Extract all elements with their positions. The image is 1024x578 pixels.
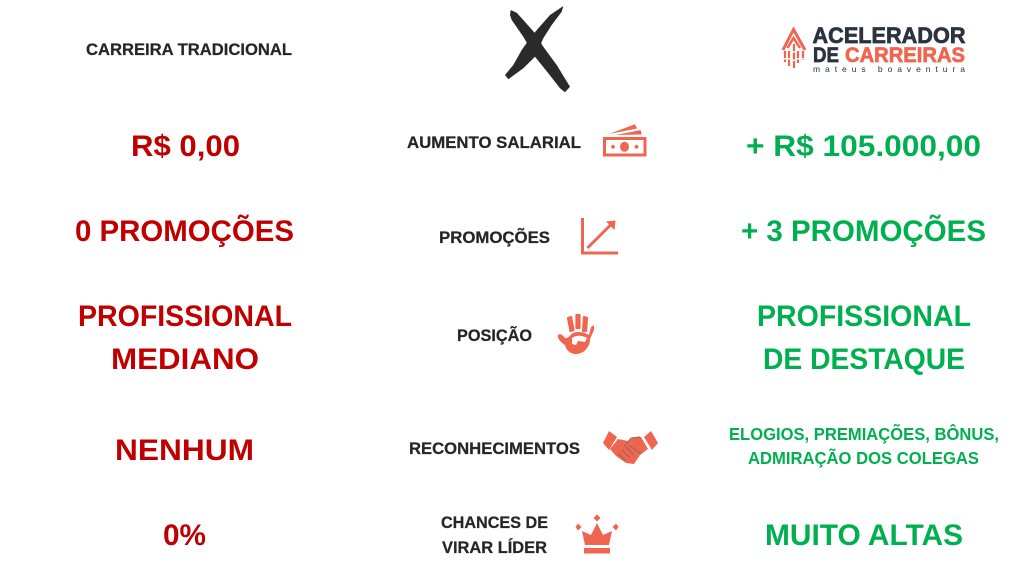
icon: crown: [576, 514, 618, 554]
logo text: ACELERADOR: [812, 23, 966, 48]
value: recognitions list: [729, 423, 999, 468]
value: profissional de destaque: PROFISSIONAL: [757, 300, 971, 333]
icon: banknotes: [604, 124, 645, 155]
icon: growth chart: [582, 218, 618, 253]
row: posição: [78, 300, 971, 376]
value: profissional de destaque: DE DESTAQUE: [763, 343, 965, 376]
row: promoções: [75, 214, 986, 253]
row: reconhecimentos: [115, 423, 999, 468]
value: acelerador salary: + R$ 105.000,00: [746, 130, 981, 163]
value: profissional mediano: PROFISSIONAL: [78, 300, 292, 333]
logo icon: rocket arrow: [783, 30, 805, 68]
heading: carreira tradicional: CARREIRA TRADICIONAL: [86, 40, 292, 59]
logo: acelerador de carreiras: [783, 23, 966, 74]
label: aumento salarial: AUMENTO SALARIAL: [407, 133, 581, 152]
value: profissional de destaque: [757, 300, 971, 376]
label: chances de virar líder: [441, 513, 548, 557]
row: aumento salarial: [131, 124, 981, 163]
value: acelerador promotions: + 3 PROMOÇÕES: [741, 214, 986, 248]
logo: acelerador de carreiras: mateus boaventura: [813, 64, 965, 74]
value: profissional mediano: [78, 300, 292, 376]
label: reconhecimentos: RECONHECIMENTOS: [409, 439, 580, 458]
logo: acelerador de carreiras: DE: [813, 44, 839, 67]
label: promoções: PROMOÇÕES: [439, 227, 550, 247]
value: zero percent: 0%: [163, 519, 206, 552]
logo: acelerador de carreiras: CARREIRAS: [845, 44, 965, 67]
value: tradicional promotions: 0 PROMOÇÕES: [75, 214, 294, 248]
value: profissional mediano: MEDIANO: [111, 343, 259, 376]
label: chances de virar líder: CHANCES DE: [441, 513, 548, 532]
icon: hand print: [558, 315, 594, 354]
icon: handshake: [603, 431, 658, 464]
value: tradicional salary: R$ 0,00: [131, 130, 240, 163]
row: chances de virar líder: [163, 513, 963, 557]
value: nenhum: NENHUM: [115, 434, 254, 467]
value: muito altas: MUITO ALTAS: [765, 519, 963, 552]
label: posição: POSIÇÃO: [457, 325, 532, 345]
value: recognitions list: ELOGIOS, PREMIAÇÕES, BÔNUS,: [729, 423, 999, 444]
value: recognitions list: ADMIRAÇÃO DOS COLEGAS: [748, 447, 979, 468]
label: chances de virar líder: VIRAR LÍDER: [442, 538, 547, 557]
icon: brushed X: [505, 6, 570, 92]
